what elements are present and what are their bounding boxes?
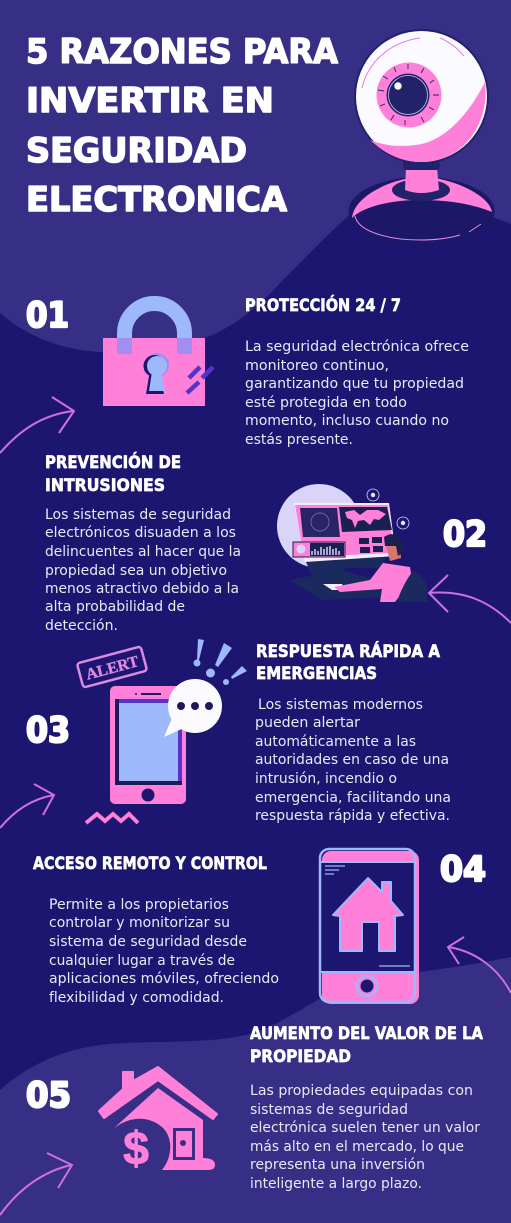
arrow 2: [429, 575, 511, 623]
text: respuesta: pueden alertar: [255, 715, 360, 731]
text: acceso: flexibilidad y comodidad.: [49, 990, 224, 1006]
text: aumento: más alto en el mercado, lo que: [250, 1139, 464, 1155]
text: prevención: electrónicos disuaden a los: [45, 525, 236, 541]
text: prevención: delincuentes al hacer que la: [45, 544, 241, 560]
text: respuesta: emergencia, facilitando una: [255, 790, 451, 806]
text: aumento: sistemas de seguridad: [250, 1102, 408, 1118]
text: acceso: sistema de seguridad desde: [49, 934, 247, 950]
arrow 5: [0, 1153, 72, 1215]
title: INVERTIR EN: [26, 81, 274, 120]
text: acceso: [49, 897, 279, 1006]
text: aumento: Las propiedades equipadas con: [250, 1083, 473, 1099]
text: acceso: Permite a los propietarios: [49, 897, 229, 913]
number 05: 05: [26, 1076, 71, 1116]
heading: prevención: PREVENCIÓN DE: [45, 451, 181, 472]
text: acceso: controlar y monitorizar su: [49, 915, 230, 931]
number 01: 01: [26, 296, 69, 336]
text: prevención: alta probabilidad de: [45, 599, 185, 615]
number 04: 04: [440, 850, 486, 890]
text: prevención: propiedad sea un objetivo: [45, 563, 227, 579]
title: ELECTRONICA: [26, 180, 287, 219]
icon: alert stamp: [77, 646, 147, 688]
number 02: 02: [443, 515, 487, 555]
text: prevención: menos atractivo debido a la: [45, 581, 239, 597]
icon: phone with house: [320, 849, 419, 1004]
heading: prevención: INTRUSIONES: [45, 475, 165, 495]
heading: prevención: [45, 451, 181, 495]
text: aumento: [250, 1083, 480, 1192]
icon: operator at monitor: [277, 484, 427, 602]
icon: house with dollar: $: [123, 1122, 149, 1174]
heading: respuesta: EMERGENCIAS: [256, 663, 377, 683]
icon: padlock: [103, 304, 213, 406]
text: respuesta: Los sistemas modernos: [258, 697, 423, 713]
heading: aumento: [250, 1023, 483, 1066]
text: protección: esté protegida en todo: [245, 395, 407, 411]
icon: house with dollar: [99, 1067, 217, 1174]
title: [26, 32, 338, 219]
arrow 3: [0, 784, 54, 828]
arrow 1: [0, 397, 74, 453]
text: prevención: detección.: [45, 618, 118, 634]
number 03: 03: [26, 711, 70, 751]
text: protección: momento, incluso cuando no: [245, 413, 449, 429]
icon: zigzag: [86, 814, 138, 823]
heading: aumento: PROPIEDAD: [250, 1046, 351, 1066]
heading: respuesta: RESPUESTA RÁPIDA A: [256, 640, 440, 661]
title: SEGURIDAD: [26, 131, 247, 170]
text: protección: [245, 339, 469, 448]
text: aumento: electrónica suelen tener un valor: [250, 1120, 480, 1136]
heading: aumento: AUMENTO DEL VALOR DE LA: [250, 1023, 483, 1043]
text: prevención: [45, 507, 241, 634]
text: respuesta: respuesta rápida y efectiva.: [255, 808, 450, 824]
icon: webcam: [348, 29, 494, 245]
text: prevención: Los sistemas de seguridad: [45, 507, 231, 523]
arrow 4: [448, 937, 511, 993]
text: respuesta: automáticamente a las: [255, 734, 416, 750]
title: 5 RAZONES PARA: [26, 32, 338, 71]
text: protección: La seguridad electrónica ofrece: [245, 339, 469, 355]
icon: phone with chat bubble: [110, 679, 222, 804]
text: protección: monitoreo continuo,: [245, 358, 389, 374]
text: aumento: representa una inversión: [250, 1157, 425, 1173]
text: respuesta: intrusión, incendio o: [255, 771, 397, 787]
text: aumento: inteligente a largo plazo.: [250, 1176, 422, 1192]
text: protección: estás presente.: [245, 432, 353, 448]
icon: alert stamp: ALERT: [84, 653, 141, 684]
text: acceso: cualquier lugar a través de: [49, 953, 235, 969]
heading: protección: PROTECCIÓN 24 / 7: [245, 294, 401, 315]
text: respuesta: autoridades en caso de una: [255, 752, 449, 768]
heading: respuesta: [256, 640, 440, 683]
icon: exclamation marks: [194, 639, 247, 685]
heading: acceso: ACCESO REMOTO Y CONTROL: [33, 853, 267, 873]
text: acceso: aplicaciones móviles, ofreciendo: [49, 971, 279, 987]
text: protección: garantizando que tu propiedad: [245, 376, 464, 392]
text: respuesta: [255, 697, 451, 824]
